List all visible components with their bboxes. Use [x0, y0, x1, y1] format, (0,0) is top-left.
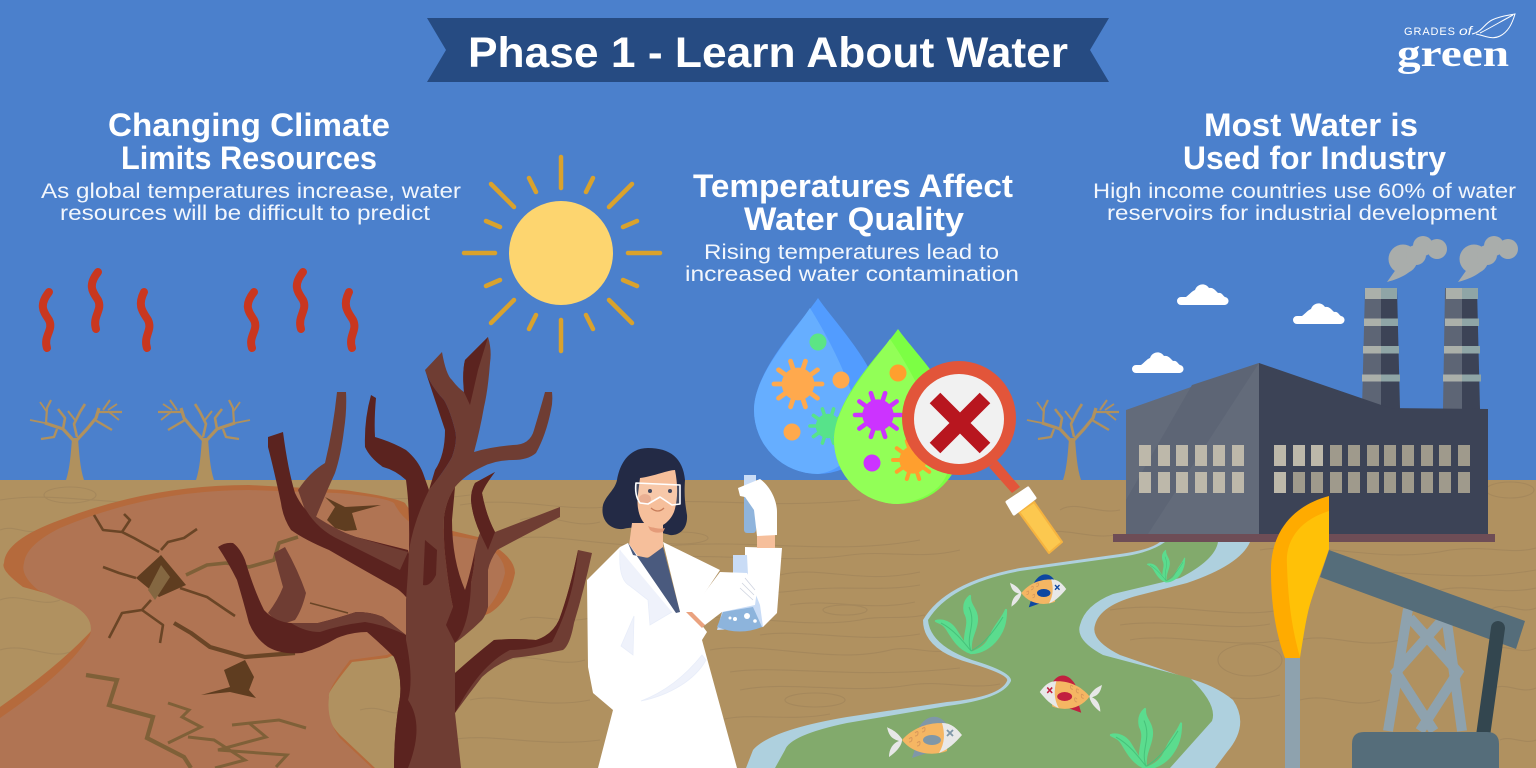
heading block: changing climate: As global temperatures increase, water — [41, 179, 461, 203]
icon: green contaminated drop — [834, 329, 962, 504]
wooden ground — [0, 480, 1536, 768]
heading block: changing climate: Limits Resources — [121, 140, 377, 176]
heading block: most water used for industry: High income countries use 60% of water — [1093, 179, 1516, 203]
river — [746, 542, 1250, 768]
heading block: most water used for industry: Used for Industry — [1183, 140, 1446, 176]
tree upper-left limb — [268, 432, 420, 600]
test tube — [744, 475, 756, 533]
oil pump jack — [1320, 550, 1525, 768]
wrist — [757, 533, 775, 548]
factory — [1113, 288, 1495, 542]
factory windows — [1139, 445, 1323, 493]
forearm and gloved hand — [690, 572, 757, 625]
tree center-left limb — [365, 395, 429, 550]
chimney smoke — [1387, 236, 1518, 282]
dry cracked land — [0, 485, 515, 768]
heading block: temperatures affect water quality: Rising temperatures lead to — [704, 240, 999, 264]
pump derrick — [1388, 609, 1462, 731]
heading block: temperatures affect water quality: increased water contamination — [685, 262, 1019, 286]
heading block: temperatures affect water quality: Water Quality — [744, 201, 964, 237]
coat shading — [620, 550, 706, 701]
heading block: temperatures affect water quality: Temperatures Affect — [693, 168, 1013, 204]
logo: Grades of Green: green — [1397, 33, 1509, 75]
title banner — [427, 18, 1109, 82]
gas flare — [1271, 496, 1329, 768]
cracks — [86, 497, 381, 768]
tree offshoots — [268, 392, 346, 625]
icon: heat waves — [43, 272, 354, 348]
scientist hair — [602, 448, 687, 535]
big dead tree — [218, 337, 592, 768]
tree lower-left limb — [218, 543, 406, 660]
icon: magnifying glass with X — [902, 361, 1062, 553]
heading block: changing climate: Changing Climate — [108, 107, 390, 143]
title text: Phase 1 - Learn About Water — [468, 29, 1068, 77]
heading block: most water used for industry: Most Water is — [1204, 107, 1418, 143]
dead fish — [887, 574, 1102, 758]
pump beam — [1320, 550, 1525, 649]
wrist of lower hand — [686, 612, 705, 628]
pump rod — [1483, 628, 1498, 736]
shirt — [628, 543, 680, 613]
heading block: most water used for industry: reservoirs for industrial development — [1107, 201, 1497, 225]
sky background — [0, 0, 1536, 480]
logo: Grades of Green: of — [1459, 24, 1474, 38]
factory base — [1113, 534, 1495, 542]
logo: Grades of Green: GRADES — [1404, 26, 1455, 38]
pump base — [1352, 732, 1499, 768]
heading block: most water used for industry — [1093, 107, 1516, 225]
heading block: changing climate: resources will be difficult to predict — [60, 201, 430, 225]
raised glove — [738, 479, 777, 536]
lab coat sleeve — [745, 547, 782, 627]
chimneys — [1362, 288, 1481, 409]
scientist neck — [628, 523, 663, 558]
logo: Grades of Green — [1397, 14, 1515, 75]
icon: blue contaminated drop — [754, 298, 882, 474]
factory walls — [1126, 363, 1259, 534]
lab coat — [587, 542, 737, 768]
tree dark shading — [394, 337, 578, 768]
icon: sun — [464, 157, 660, 351]
scientist face — [637, 470, 677, 527]
white clouds — [1132, 284, 1345, 373]
heading block: changing climate — [41, 107, 461, 225]
seaweed — [936, 551, 1185, 768]
flask — [717, 555, 763, 630]
tree main trunk and limbs — [394, 337, 592, 768]
scientist — [587, 448, 782, 768]
heading block: temperatures affect water quality — [685, 168, 1019, 286]
background bare trees — [30, 400, 1119, 480]
goggles — [636, 483, 680, 505]
